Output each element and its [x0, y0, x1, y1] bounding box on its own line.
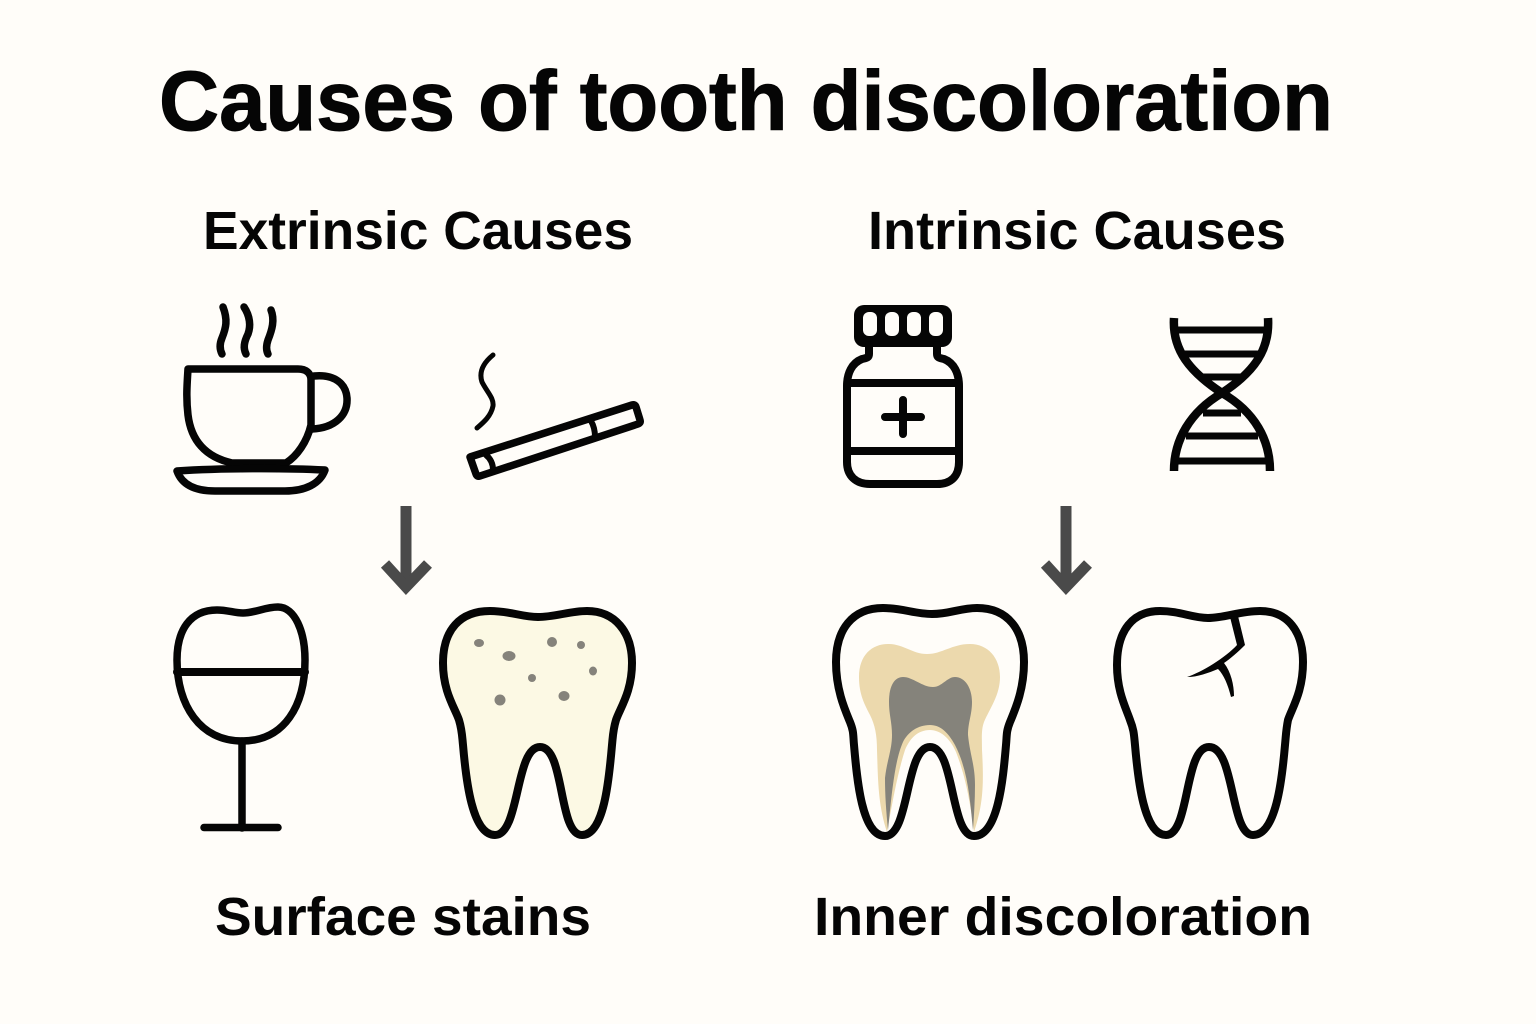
arrow: extrinsic: [385, 506, 428, 587]
arrow: intrinsic: [1045, 506, 1088, 587]
icon: cigarette: [470, 355, 640, 476]
icon: cracked tooth: [1117, 611, 1303, 835]
heading: intrinsic causes: Intrinsic Causes: [868, 201, 1286, 261]
icon: stained tooth: [443, 611, 632, 835]
label: inner discoloration: Inner discoloration: [814, 887, 1312, 947]
icon: wine glass: [177, 607, 305, 828]
icon: inner discolored tooth: [836, 608, 1024, 836]
icon: coffee cup: [177, 307, 347, 491]
label: surface stains: Surface stains: [215, 887, 591, 947]
heading: extrinsic causes: Extrinsic Causes: [203, 201, 633, 261]
icon: DNA helix: [1174, 318, 1270, 471]
title: Causes of tooth discoloration: [159, 54, 1333, 148]
icon: medicine bottle: [847, 305, 959, 484]
